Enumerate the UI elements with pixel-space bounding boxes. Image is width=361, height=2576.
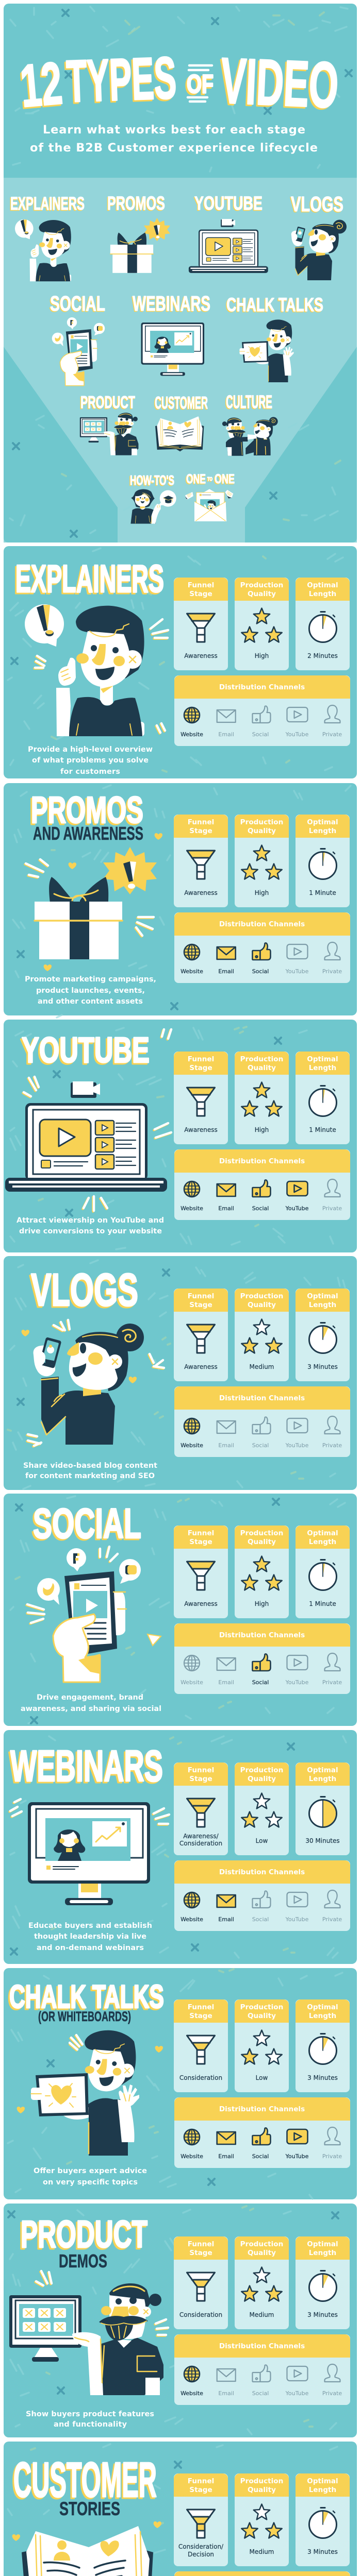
panel: production quality: Quality xyxy=(248,590,276,598)
panel: production quality: Production xyxy=(240,2003,283,2011)
panel: funnel stage: Awareness xyxy=(184,889,218,896)
panel: funnel stage: Funnel xyxy=(188,2477,214,2485)
mini: explainers: EXPLAINERS xyxy=(10,194,85,214)
description xyxy=(23,1462,157,1480)
panel: distribution channels: YouTube xyxy=(285,1916,309,1923)
panel: distribution channels: Website xyxy=(180,2153,203,2160)
panel: vlogs xyxy=(4,1256,357,1490)
panel: optimal length: Length xyxy=(309,2486,336,2494)
panel: production quality: Production xyxy=(240,818,283,826)
panel: optimal length: 3 Minutes xyxy=(307,2074,338,2081)
description: Offer buyers expert advice xyxy=(34,2167,147,2175)
mini: youtube xyxy=(189,193,268,273)
panel: funnel stage: Consideration xyxy=(179,2311,222,2318)
panel: production quality: Quality xyxy=(248,827,276,835)
description xyxy=(25,975,156,1006)
panel: distribution channels: Private xyxy=(322,1916,342,1923)
description xyxy=(28,1922,152,1952)
panel: optimal length: Optimal xyxy=(307,1529,338,1537)
description: Attract viewership on YouTube and xyxy=(17,1216,164,1225)
illustration: open book xyxy=(22,2526,153,2576)
panel: production quality: Production xyxy=(240,1055,283,1063)
sparks xyxy=(10,1799,169,1824)
panel: funnel stage: Decision xyxy=(188,2551,214,2558)
description xyxy=(17,1216,164,1235)
mini: vlogs xyxy=(291,192,347,280)
panel: funnel stage: Stage xyxy=(189,2486,212,2494)
illustration: phone in hand xyxy=(37,1548,141,1682)
main title xyxy=(18,45,340,122)
description: Share video-based blog content xyxy=(23,1462,157,1470)
panel: optimal length: Optimal xyxy=(307,1055,338,1063)
panel: product demos xyxy=(4,2204,357,2437)
panel: production quality: Quality xyxy=(248,2486,276,2494)
panel: funnel stage: Awareness xyxy=(184,1600,218,1607)
stats panels xyxy=(174,578,350,746)
panel: funnel stage xyxy=(174,2236,228,2329)
panel: funnel stage: Funnel xyxy=(188,1766,214,1774)
panel: distribution channels: Website xyxy=(180,1679,203,1686)
panel: funnel stage xyxy=(174,1052,228,1144)
panel: distribution channels: Social xyxy=(252,1442,269,1449)
panel: distribution channels: Distribution Channels xyxy=(219,683,305,691)
panel: distribution channels: Social xyxy=(252,1679,269,1686)
panel: optimal length: Length xyxy=(309,827,336,835)
description: product launches, events, xyxy=(36,987,145,995)
description: for customers xyxy=(60,768,120,776)
mini: social: SOCIAL xyxy=(50,292,105,315)
panel: production quality: Production xyxy=(240,1529,283,1537)
panel: funnel stage xyxy=(174,815,228,907)
stats panels xyxy=(174,1526,350,1694)
mini: customer: CUSTOMER xyxy=(155,393,208,412)
panel: promos xyxy=(4,783,357,1018)
subtitle: of the B2B Customer experience lifecycle xyxy=(30,141,318,155)
panel: distribution channels: Private xyxy=(322,1442,342,1449)
mini: how-tos: HOW-TO'S xyxy=(130,472,174,488)
panel: header intro xyxy=(4,4,357,543)
panel: optimal length: Length xyxy=(309,1064,336,1072)
panel: funnel stage: Awareness xyxy=(184,652,218,659)
panel: distribution channels xyxy=(174,2097,350,2168)
panel: optimal length xyxy=(296,1762,350,1855)
description: for content marketing and SEO xyxy=(25,1472,155,1480)
panel: distribution channels: YouTube xyxy=(285,731,309,738)
description: Drive engagement, brand xyxy=(37,1693,143,1702)
panel: production quality: Production xyxy=(240,1292,283,1300)
illustration: thinking man xyxy=(25,604,144,736)
panel: distribution channels xyxy=(174,2334,350,2405)
illustration: laptop xyxy=(5,1081,167,1192)
mini: chalk talks xyxy=(226,294,323,382)
panel: distribution channels: Website xyxy=(180,2390,203,2397)
panel: optimal length: 30 Minutes xyxy=(305,1837,340,1844)
title: PRODUCT xyxy=(21,2213,147,2256)
panel: production quality: Medium xyxy=(250,2311,274,2318)
subtitle xyxy=(30,123,318,155)
mini: one to one xyxy=(185,472,235,521)
panel: optimal length: Optimal xyxy=(307,2003,338,2011)
description: on very specific topics xyxy=(43,2178,138,2187)
stats panels xyxy=(174,1999,350,2168)
panel: funnel stage: Stage xyxy=(189,1538,212,1546)
title: YOUTUBE xyxy=(22,1030,150,1070)
description: Show buyers product features xyxy=(26,2410,154,2418)
panel: optimal length: Optimal xyxy=(307,2477,338,2485)
panel: funnel stage: Stage xyxy=(189,1301,212,1309)
mini: product: PRODUCT xyxy=(80,393,135,412)
panel: optimal length: 1 Minute xyxy=(309,1126,336,1133)
panel: distribution channels xyxy=(174,1149,350,1220)
description: and other content assets xyxy=(38,997,143,1006)
mini: customer xyxy=(155,393,208,451)
title: WEBINARS xyxy=(10,1742,163,1791)
stats panels xyxy=(174,2236,350,2405)
panel: distribution channels: Website xyxy=(180,968,203,975)
panel: distribution channels: Distribution Channels xyxy=(219,1868,305,1876)
sparks xyxy=(27,1547,118,1623)
subtitle: (OR WHITEBOARDS) xyxy=(38,2009,131,2024)
panel: funnel stage: Awareness xyxy=(184,1126,218,1133)
panel: optimal length: Length xyxy=(309,1301,336,1309)
panel: optimal length: Optimal xyxy=(307,1292,338,1300)
panel: optimal length: Optimal xyxy=(307,2240,338,2248)
panel: distribution channels: Private xyxy=(322,1679,342,1686)
panel: distribution channels xyxy=(174,912,350,983)
panel: production quality: High xyxy=(255,1126,269,1133)
panel: optimal length: Length xyxy=(309,2249,336,2257)
panel: production quality: Medium xyxy=(250,2548,274,2555)
panel: distribution channels: Distribution Channels xyxy=(219,1157,305,1165)
panel: optimal length: Length xyxy=(309,590,336,598)
panel: distribution channels: Website xyxy=(180,1442,203,1449)
mini: how-tos xyxy=(130,472,176,523)
panel: distribution channels: Private xyxy=(322,2153,342,2160)
mini: culture: CULTURE xyxy=(226,392,272,412)
panel: optimal length xyxy=(296,1526,350,1618)
panel: distribution channels: Distribution Channels xyxy=(219,920,305,928)
panel: funnel stage: Funnel xyxy=(188,818,214,826)
panel: customer stories xyxy=(4,2442,357,2576)
panel: production quality xyxy=(235,2236,289,2329)
panel: distribution channels: Website xyxy=(180,1205,203,1212)
panel: funnel stage: Stage xyxy=(189,827,212,835)
panel: optimal length xyxy=(296,1289,350,1381)
panel: distribution channels: Email xyxy=(218,1679,234,1686)
description: Promote marketing campaigns, xyxy=(25,975,156,984)
illustration: man presenting monitor xyxy=(9,2283,163,2395)
title: VLOGS xyxy=(31,1264,138,1315)
illustration: bun woman vlogging xyxy=(34,1324,144,1445)
panel: funnel stage: Consideration/ xyxy=(178,2543,224,2550)
panel: distribution channels: Social xyxy=(252,968,269,975)
description xyxy=(28,745,153,776)
panel: optimal length: 1 Minute xyxy=(309,889,336,896)
panel: funnel stage: Stage xyxy=(189,1064,212,1072)
mini: social xyxy=(50,292,105,386)
panel: production quality: Quality xyxy=(248,1775,276,1783)
main title: TYPES xyxy=(65,45,177,115)
panel: production quality: High xyxy=(255,652,269,659)
panel: production quality: Quality xyxy=(248,2012,276,2020)
panel: production quality: Production xyxy=(240,2477,283,2485)
mini: culture xyxy=(222,392,278,456)
panel: funnel stage: Consideration xyxy=(179,2074,222,2081)
panel: distribution channels: Website xyxy=(180,1916,203,1923)
panel: chalk talks xyxy=(4,1968,357,2199)
panel: distribution channels xyxy=(174,2571,350,2576)
panel: distribution channels: Social xyxy=(252,1916,269,1923)
panel: funnel stage: Funnel xyxy=(188,581,214,589)
panel: webinars xyxy=(4,1730,357,1964)
panel: optimal length xyxy=(296,2236,350,2329)
description: thought leadership via live xyxy=(34,1933,146,1941)
description: of what problems you solve xyxy=(32,756,149,765)
panel: funnel stage: Consideration xyxy=(179,1840,222,1847)
panel: funnel stage: Stage xyxy=(189,2012,212,2020)
panel: distribution channels: Social xyxy=(252,1205,269,1212)
panel: funnel stage xyxy=(174,1289,228,1381)
panel: optimal length: Length xyxy=(309,1538,336,1546)
panel: optimal length: 1 Minute xyxy=(309,1600,336,1607)
description: drive conversions to your website xyxy=(19,1227,162,1235)
sparks xyxy=(35,619,168,733)
panel: distribution channels: Email xyxy=(218,1442,234,1449)
description xyxy=(21,1693,161,1713)
subtitle: Learn what works best for each stage xyxy=(43,123,305,137)
panel: funnel stage xyxy=(174,1999,228,2092)
mini: promos: PROMOS xyxy=(107,193,165,214)
panel: distribution channels xyxy=(174,1623,350,1694)
panel: funnel stage: Stage xyxy=(189,2249,212,2257)
mini: chalk talks: CHALK TALKS xyxy=(226,294,323,315)
stats panels xyxy=(174,1052,350,1220)
main title: OF xyxy=(187,70,214,98)
panel: explainers xyxy=(4,546,357,778)
panel: distribution channels xyxy=(174,675,350,746)
panel: production quality: Production xyxy=(240,2240,283,2248)
stats panels xyxy=(174,1289,350,1457)
sparks xyxy=(70,2035,83,2049)
panel: optimal length: 3 Minutes xyxy=(307,1363,338,1370)
panel: funnel stage: Funnel xyxy=(188,1055,214,1063)
mini: one to one: ONE xyxy=(186,472,206,486)
panel: production quality xyxy=(235,1289,289,1381)
description: and on-demand webinars xyxy=(37,1944,144,1952)
sparks xyxy=(28,1320,164,1446)
stats panels xyxy=(174,815,350,983)
panel: distribution channels: YouTube xyxy=(285,1679,309,1686)
panel: funnel stage: Stage xyxy=(189,590,212,598)
panel: funnel stage xyxy=(174,578,228,670)
panel: funnel stage: Stage xyxy=(189,1775,212,1783)
panel: distribution channels: Email xyxy=(218,731,234,738)
panel: optimal length: Optimal xyxy=(307,818,338,826)
description: Educate buyers and establish xyxy=(28,1922,152,1930)
illustration: man with board xyxy=(31,2030,139,2156)
panel: production quality xyxy=(235,1762,289,1855)
panel: production quality xyxy=(235,1052,289,1144)
panel: production quality xyxy=(235,2473,289,2566)
title: EXPLAINERS xyxy=(15,557,164,600)
panel: distribution channels: Website xyxy=(180,731,203,738)
panel: distribution channels: Email xyxy=(218,968,234,975)
subtitle: STORIES xyxy=(59,2498,120,2519)
panel: funnel stage: Funnel xyxy=(188,2240,214,2248)
panel: production quality: Medium xyxy=(250,1363,274,1370)
stats panels xyxy=(174,2473,350,2576)
panel: production quality: Low xyxy=(256,2074,268,2081)
panel: optimal length: Length xyxy=(309,2012,336,2020)
panel: distribution channels: Social xyxy=(252,731,269,738)
illustration: monitor with presenter xyxy=(28,1802,150,1905)
panel: production quality: Quality xyxy=(248,1301,276,1309)
panel: production quality: Production xyxy=(240,581,283,589)
panel: distribution channels: Distribution Channels xyxy=(219,1394,305,1402)
panel: production quality: Quality xyxy=(248,1538,276,1546)
panel: optimal length: Optimal xyxy=(307,581,338,589)
panel: distribution channels: Distribution Channels xyxy=(219,2342,305,2350)
title: SOCIAL xyxy=(33,1500,141,1547)
panel: optimal length xyxy=(296,578,350,670)
panel: optimal length: 3 Minutes xyxy=(307,2548,338,2555)
sparks xyxy=(26,859,154,936)
panel: production quality: Production xyxy=(240,1766,283,1774)
description: awareness, and sharing via social xyxy=(21,1705,161,1713)
panel: production quality xyxy=(235,1526,289,1618)
mini: youtube: YOUTUBE xyxy=(194,193,262,214)
panel: production quality: Quality xyxy=(248,1064,276,1072)
panel: funnel stage xyxy=(174,1762,228,1855)
mini: explainers xyxy=(10,194,85,281)
mini: promos xyxy=(107,193,170,273)
description xyxy=(34,2167,147,2187)
panel: distribution channels: Email xyxy=(218,1205,234,1212)
panel: optimal length xyxy=(296,2473,350,2566)
title: CHALK TALKS xyxy=(9,1979,164,2015)
illustration: gift box xyxy=(35,847,157,959)
panel: funnel stage xyxy=(174,1526,228,1618)
panel: distribution channels: Private xyxy=(322,1205,342,1212)
mini: one to one: ONE xyxy=(215,472,235,486)
panel: optimal length xyxy=(296,1999,350,2092)
mini: one to one: TO xyxy=(207,477,212,482)
panel: optimal length xyxy=(296,1052,350,1144)
description: Provide a high-level overview xyxy=(28,745,153,754)
main title: 12 xyxy=(18,49,64,120)
subtitle: DEMOS xyxy=(59,2250,107,2272)
panel: funnel stage xyxy=(174,2473,228,2566)
panel: distribution channels: Email xyxy=(218,1916,234,1923)
panel: distribution channels: YouTube xyxy=(285,2153,309,2160)
title: CUSTOMER xyxy=(13,2452,157,2507)
panel: distribution channels: Private xyxy=(322,731,342,738)
panel: distribution channels: Email xyxy=(218,2390,234,2397)
panel: social xyxy=(4,1494,357,1726)
panel: optimal length: 2 Minutes xyxy=(307,652,338,659)
panel: optimal length xyxy=(296,815,350,907)
panel: distribution channels: YouTube xyxy=(285,1205,309,1212)
panel: production quality: High xyxy=(255,889,269,896)
panel: distribution channels: YouTube xyxy=(285,2390,309,2397)
panel: youtube xyxy=(4,1020,357,1252)
panel: distribution channels: Email xyxy=(218,2153,234,2160)
title: PROMOS xyxy=(31,790,143,831)
panel: optimal length: Length xyxy=(309,1775,336,1783)
panel: production quality xyxy=(235,1999,289,2092)
panel: distribution channels: Distribution Channels xyxy=(219,1631,305,1639)
panel: production quality: Quality xyxy=(248,2249,276,2257)
sparks xyxy=(36,2271,168,2335)
description xyxy=(26,2410,154,2429)
panel: optimal length: Optimal xyxy=(307,1766,338,1774)
panel: production quality: Low xyxy=(256,1837,268,1844)
sparks xyxy=(24,1029,171,1211)
mini: webinars xyxy=(133,292,210,376)
panel: distribution channels: Private xyxy=(322,2390,342,2397)
panel: distribution channels: YouTube xyxy=(285,968,309,975)
panel: funnel stage: Funnel xyxy=(188,2003,214,2011)
description: and functionality xyxy=(54,2420,127,2429)
panel: distribution channels xyxy=(174,1386,350,1457)
panel: distribution channels: Social xyxy=(252,2390,269,2397)
panel: funnel stage: Funnel xyxy=(188,1529,214,1537)
panel: funnel stage: Funnel xyxy=(188,1292,214,1300)
panel: production quality xyxy=(235,578,289,670)
mini: product xyxy=(80,393,138,455)
subtitle: AND AWARENESS xyxy=(33,823,143,844)
panel: funnel stage: Awareness xyxy=(184,1363,218,1370)
panel: distribution channels: Distribution Channels xyxy=(219,2105,305,2113)
panel: distribution channels: Social xyxy=(252,2153,269,2160)
panel: funnel stage: Awareness/ xyxy=(183,1833,219,1840)
stats panels xyxy=(174,1762,350,1931)
panel: distribution channels: Private xyxy=(322,968,342,975)
mini: webinars: WEBINARS xyxy=(133,292,210,315)
panel: production quality xyxy=(235,815,289,907)
panel: distribution channels xyxy=(174,1860,350,1931)
panel: distribution channels: YouTube xyxy=(285,1442,309,1449)
panel: production quality: High xyxy=(255,1600,269,1607)
panel: optimal length: 3 Minutes xyxy=(307,2311,338,2318)
